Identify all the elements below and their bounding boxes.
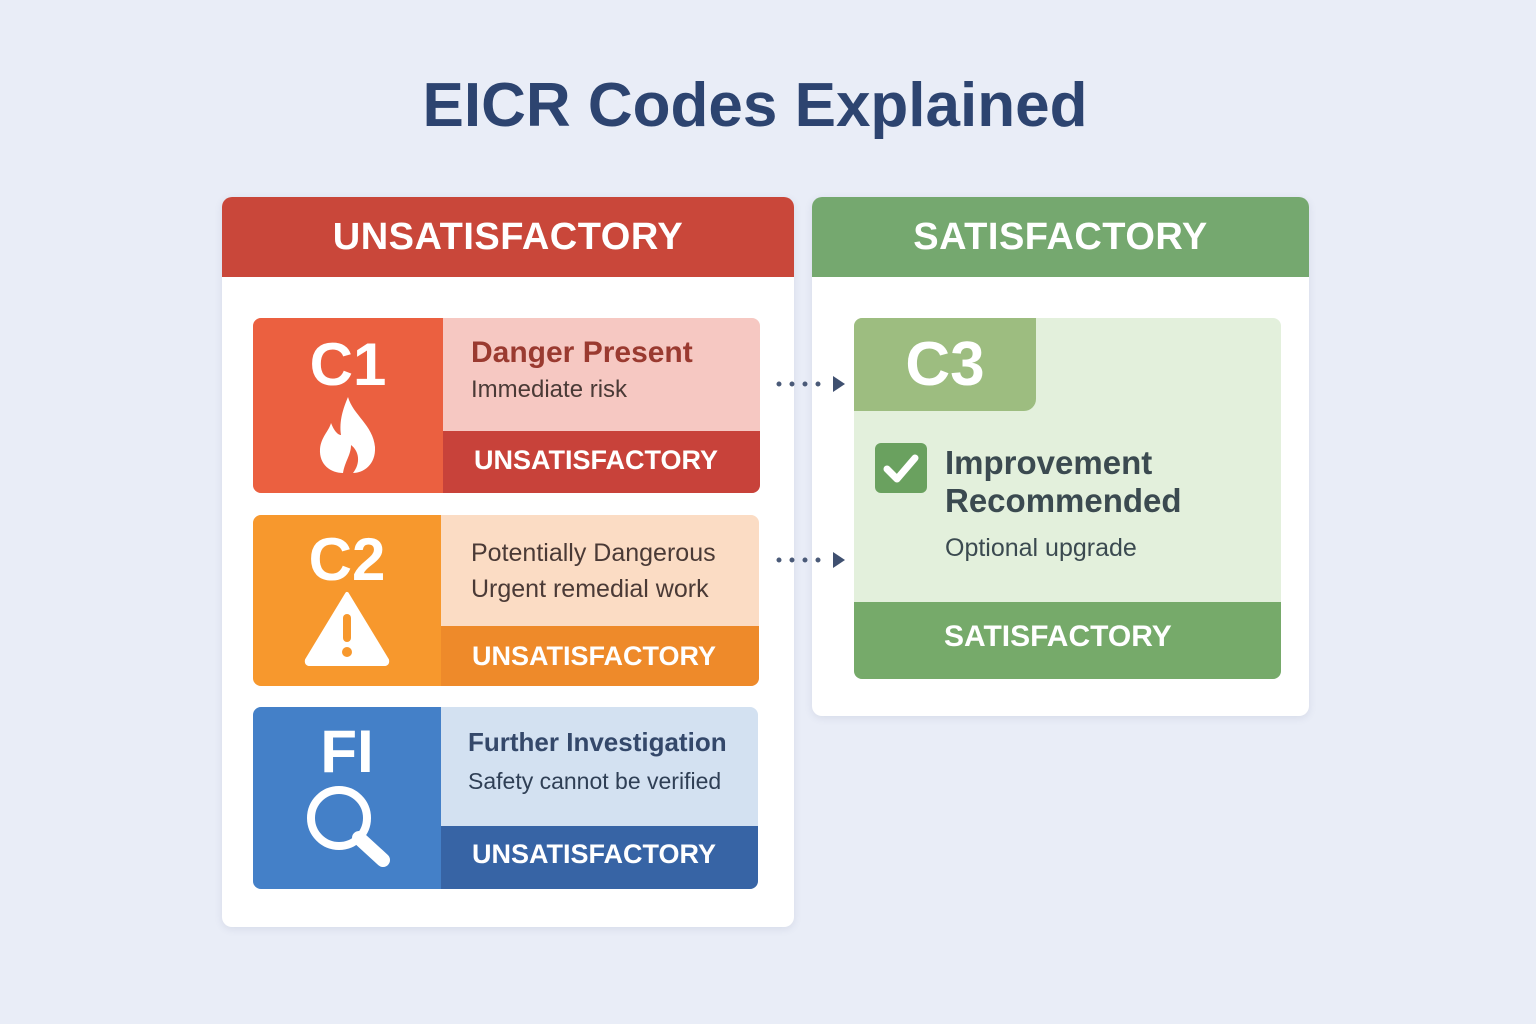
arrow: C1 to C3 xyxy=(776,376,845,392)
card: C3 xyxy=(854,318,1281,679)
code C2 with warning icon xyxy=(253,515,441,686)
text: danger present xyxy=(471,336,693,403)
title: EICR Codes Explained xyxy=(423,71,1087,140)
text: danger present: Immediate risk xyxy=(471,376,627,403)
code tab C3 xyxy=(854,318,1036,411)
heading: satisfactory xyxy=(812,197,1309,277)
arrow: C2 to C3 xyxy=(776,552,845,568)
band: unsatisfactory: UNSATISFACTORY xyxy=(472,839,716,869)
panel: unsatisfactory xyxy=(222,197,794,927)
code tab C3: C3 xyxy=(905,330,985,399)
band: unsatisfactory: UNSATISFACTORY xyxy=(472,641,716,671)
heading: satisfactory: SATISFACTORY xyxy=(913,216,1208,258)
code FI with magnifier icon: FI xyxy=(320,718,374,785)
card: C1 xyxy=(253,318,760,493)
code C1 with flame icon: C1 xyxy=(310,331,386,398)
panel: satisfactory xyxy=(812,197,1309,716)
text: improvement recommended: Improvement xyxy=(945,444,1152,481)
text: improvement recommended: Recommended xyxy=(945,482,1182,519)
code C1 with flame icon xyxy=(253,318,443,493)
text: further investigation: Further Investigation xyxy=(468,727,727,757)
heading: unsatisfactory xyxy=(222,197,794,277)
code C2 with warning icon: C2 xyxy=(309,526,385,593)
band: unsatisfactory xyxy=(441,826,758,889)
text: danger present: Danger Present xyxy=(471,336,693,369)
heading: unsatisfactory: UNSATISFACTORY xyxy=(333,216,683,258)
band: unsatisfactory xyxy=(441,626,759,686)
text: potentially dangerous: Urgent remedial work xyxy=(471,575,709,603)
code FI with magnifier icon xyxy=(253,707,441,889)
card: C2 xyxy=(253,515,759,686)
text: further investigation xyxy=(468,727,727,794)
text: improvement recommended: Optional upgrade xyxy=(945,534,1137,562)
icon: checkbox xyxy=(875,443,927,493)
text: further investigation: Safety cannot be verified xyxy=(468,768,721,794)
band: satisfactory: SATISFACTORY xyxy=(944,620,1172,653)
card: FI xyxy=(253,707,758,889)
band: unsatisfactory: UNSATISFACTORY xyxy=(474,445,718,475)
text: improvement recommended xyxy=(945,444,1182,562)
text: potentially dangerous xyxy=(471,539,716,603)
band: satisfactory xyxy=(854,602,1281,679)
band: unsatisfactory xyxy=(443,431,760,493)
text: potentially dangerous: Potentially Dangerous xyxy=(471,539,716,567)
